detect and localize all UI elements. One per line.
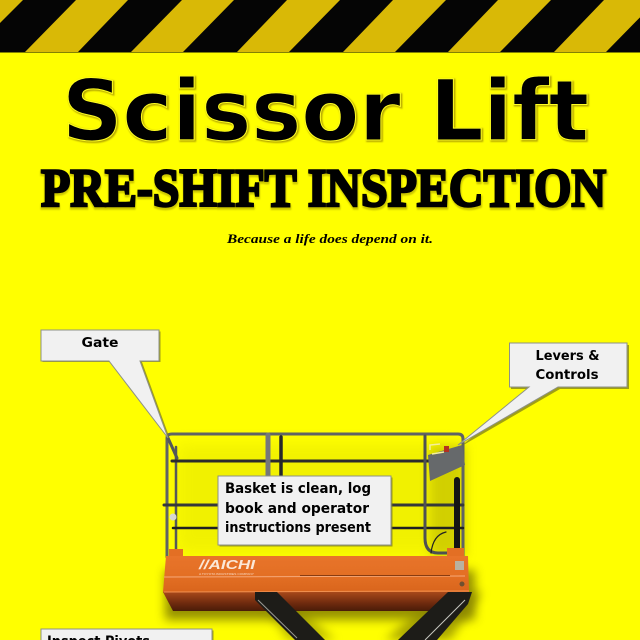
- scissor lift illustration: [163, 434, 482, 640]
- lift shadow glow: [165, 444, 482, 640]
- hazard stripe band: [0, 0, 640, 52]
- brand logo: //AICHI: [198, 557, 255, 572]
- basket rails: [164, 434, 463, 557]
- callout: basket: book and operator: [225, 501, 369, 517]
- title: Scissor Lift: [63, 63, 590, 161]
- callout: gate: [41, 330, 170, 439]
- tagline: Because a life does depend on it.: [226, 231, 433, 246]
- callout: levers and controls: Controls: [536, 368, 599, 383]
- callout: levers and controls: Levers &: [536, 349, 600, 364]
- callout: basket: instructions present: [225, 520, 371, 536]
- title: Scissor Lift: [62, 62, 589, 160]
- scissor arms: [255, 592, 472, 640]
- callout: inspect pivots: [41, 629, 214, 640]
- brand tagline: A TOYOTA INDUSTRIES COMPANY: [199, 572, 254, 576]
- callout: gate: Gate: [82, 336, 119, 351]
- callout: levers and controls: [458, 343, 629, 447]
- gate latch: [170, 514, 176, 520]
- callout: basket: Basket is clean, log: [225, 481, 371, 497]
- callout: basket: [218, 476, 392, 546]
- orange platform: [163, 548, 469, 611]
- control box: [428, 444, 465, 481]
